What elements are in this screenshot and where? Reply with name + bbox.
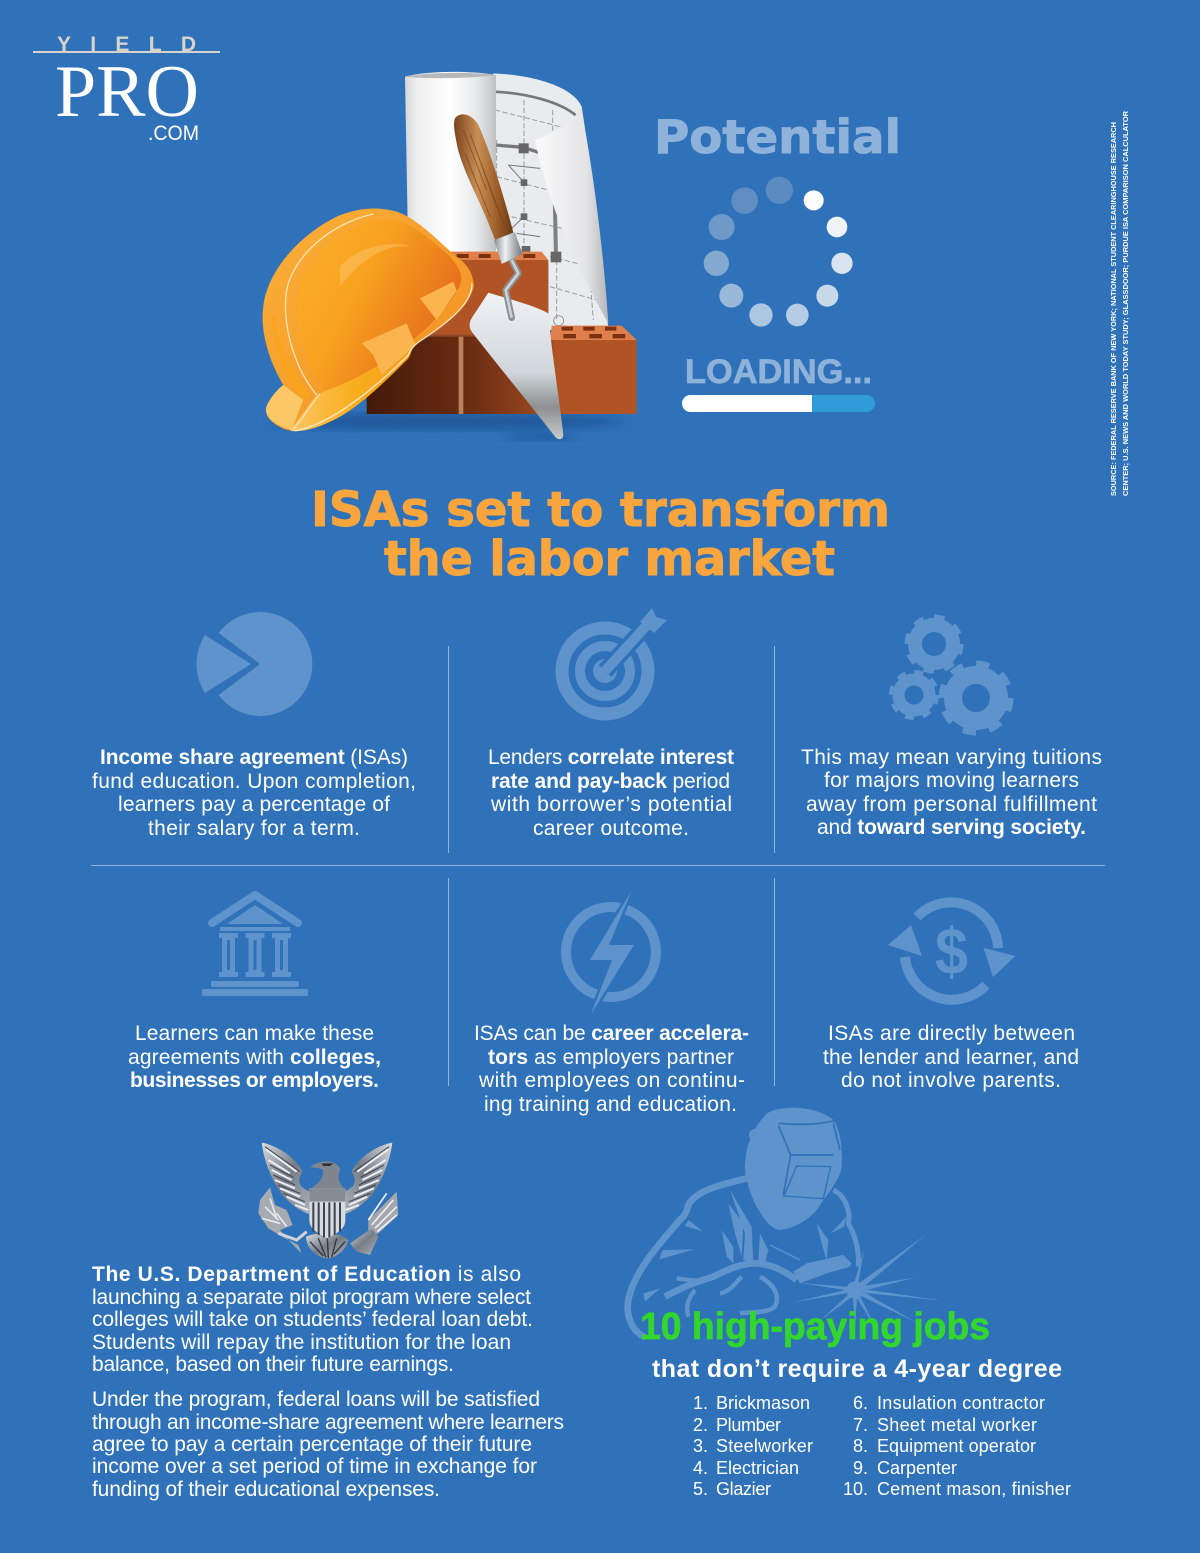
text: lenders correlate: Lenders correlate interest bbox=[488, 746, 734, 769]
text: income share agreement: fund education. Upon completion, bbox=[92, 770, 416, 793]
title bbox=[311, 482, 890, 587]
text: directly between lender and learner: the lender and learner, and bbox=[823, 1046, 1079, 1069]
list: jobs 6 to 10: 7. bbox=[853, 1415, 868, 1435]
list: jobs 1 to 5: Brickmason bbox=[716, 1393, 810, 1413]
text: income-share program details: funding of their educational expenses. bbox=[92, 1478, 440, 1501]
text: income-share program details bbox=[92, 1388, 564, 1501]
text: income share agreement: Income share agreement (ISAs) bbox=[100, 746, 408, 769]
icon: pie chart bbox=[197, 612, 312, 716]
list: jobs 6 to 10: Cement mason, finisher bbox=[877, 1479, 1071, 1499]
icon: gears bbox=[892, 618, 1010, 732]
list: jobs 1 to 5: Steelworker bbox=[716, 1436, 813, 1456]
heading: Potential: Potential bbox=[654, 110, 901, 164]
list: jobs 6 to 10: Insulation contractor bbox=[877, 1393, 1045, 1413]
trowel bbox=[454, 114, 563, 439]
logo: Yield Pro .com: .COM bbox=[148, 122, 199, 145]
text: directly between lender and learner: do not involve parents. bbox=[841, 1069, 1061, 1092]
text: varying tuitions: away from personal fulfillment bbox=[806, 793, 1097, 816]
logo: Yield Pro .com: YIELD bbox=[57, 33, 196, 56]
text: Department of Education pilot: balance, based on their future earnings. bbox=[92, 1353, 454, 1376]
source note: CENTER; U.S. NEWS AND WORLD TODAY STUDY; GLASSDOOR; PURDUE ISA COMPARISON CALCULATOR bbox=[1121, 110, 1130, 496]
text: lenders correlate bbox=[488, 746, 734, 840]
icon: dollar with circular arrows: $ bbox=[935, 914, 968, 988]
icon: silver eagle seal bbox=[258, 1143, 398, 1258]
list: jobs 1 to 5: Glazier bbox=[716, 1479, 771, 1499]
text: Department of Education pilot: The U.S. Department of Education is also bbox=[92, 1263, 521, 1286]
logo: Yield Pro .com: PRO bbox=[55, 51, 199, 133]
text: varying tuitions: This may mean varying tuitions bbox=[801, 746, 1102, 769]
text: income-share program details: agree to pay a certain percentage of their future bbox=[92, 1433, 532, 1456]
text: income-share program details: income over a set period of time in exchange for bbox=[92, 1455, 537, 1478]
loading spinner bbox=[704, 177, 853, 327]
list: jobs 1 to 5: 1. bbox=[693, 1393, 708, 1413]
text: learners can make: businesses or employers. bbox=[130, 1069, 379, 1092]
icon: dollar with circular arrows bbox=[888, 902, 1016, 1000]
text: Department of Education pilot: launching a separate pilot program where select bbox=[92, 1286, 531, 1309]
text: income-share program details: Under the program, federal loans will be satisfied bbox=[92, 1388, 540, 1411]
source note bbox=[1109, 110, 1130, 496]
text: learners can make bbox=[128, 1022, 381, 1092]
text: Department of Education pilot: Students will repay the institution for the loan bbox=[92, 1331, 511, 1354]
subheading: that don’t require a 4-year degree bbox=[652, 1355, 1062, 1383]
list: jobs 6 to 10: 8. bbox=[853, 1436, 868, 1456]
text: career accelerators: ISAs can be career accelera- bbox=[474, 1022, 749, 1045]
text: directly between lender and learner bbox=[823, 1022, 1079, 1092]
upper brick bbox=[420, 252, 548, 338]
text: lenders correlate: rate and pay-back period bbox=[491, 770, 730, 793]
title: ISAs set to transform bbox=[311, 482, 890, 538]
text: career accelerators: with employees on continu- bbox=[478, 1069, 745, 1092]
list: jobs 1 to 5: 5. bbox=[693, 1479, 708, 1499]
blueprint sheet bbox=[493, 73, 608, 330]
lower bricks bbox=[367, 326, 637, 414]
hero illustration: hard hat, bricks, trowel and blueprint bbox=[263, 72, 637, 441]
list: jobs 6 to 10: 6. bbox=[853, 1393, 868, 1413]
list: jobs 1 to 5: 3. bbox=[693, 1436, 708, 1456]
text: career accelerators: tors as employers partner bbox=[488, 1046, 734, 1069]
text: career accelerators: ing training and education. bbox=[484, 1093, 737, 1116]
text: income share agreement bbox=[92, 746, 416, 840]
list: jobs 6 to 10: Carpenter bbox=[877, 1458, 957, 1478]
text: varying tuitions bbox=[801, 746, 1102, 839]
loading progress bar bbox=[682, 395, 875, 412]
list: jobs 1 to 5: Plumber bbox=[716, 1415, 781, 1435]
hard hat bbox=[263, 209, 474, 431]
icon: bank building bbox=[202, 895, 308, 996]
title: the labor market bbox=[384, 531, 835, 587]
text: varying tuitions: for majors moving learners bbox=[824, 769, 1079, 792]
text: lenders correlate: career outcome. bbox=[533, 817, 689, 840]
list: jobs 6 to 10: 9. bbox=[853, 1458, 868, 1478]
list: jobs 6 to 10: 10. bbox=[843, 1479, 868, 1499]
heading: 10 high-paying jobs: 10 high-paying jobs bbox=[640, 1306, 990, 1348]
text: income share agreement: their salary for a term. bbox=[148, 817, 360, 840]
icon: lightning bolt in ring bbox=[566, 891, 656, 1014]
loading label: LOADING... bbox=[685, 353, 872, 391]
list: jobs 6 to 10 bbox=[843, 1393, 1071, 1499]
text: learners can make: Learners can make these bbox=[135, 1022, 374, 1045]
text: learners can make: agreements with colleges, bbox=[128, 1046, 381, 1069]
list: jobs 1 to 5: 4. bbox=[693, 1458, 708, 1478]
text: income-share program details: through an income-share agreement where learners bbox=[92, 1411, 564, 1434]
blueprint roll bbox=[405, 72, 496, 260]
text: career accelerators bbox=[474, 1022, 749, 1116]
illustration: welder silhouette bbox=[628, 1108, 943, 1337]
list: jobs 1 to 5: Electrician bbox=[716, 1458, 799, 1478]
text: Department of Education pilot: colleges will take on students’ federal loan debt. bbox=[92, 1308, 533, 1331]
text: directly between lender and learner: ISAs are directly between bbox=[828, 1022, 1075, 1045]
logo: Yield Pro .com bbox=[33, 33, 220, 145]
source note: SOURCE: FEDERAL RESERVE BANK OF NEW YORK; NATIONAL STUDENT CLEARINGHOUSE RESEARCH bbox=[1109, 122, 1118, 496]
list: jobs 1 to 5: 2. bbox=[693, 1415, 708, 1435]
list: jobs 1 to 5 bbox=[693, 1393, 813, 1499]
icon: target with arrow bbox=[562, 608, 667, 714]
text: varying tuitions: and toward serving society. bbox=[817, 816, 1086, 839]
list: jobs 6 to 10: Sheet metal worker bbox=[877, 1415, 1037, 1435]
list: jobs 6 to 10: Equipment operator bbox=[877, 1436, 1036, 1456]
text: lenders correlate: with borrower’s potential bbox=[490, 793, 732, 816]
text: income share agreement: learners pay a percentage of bbox=[118, 793, 390, 816]
text: Department of Education pilot bbox=[92, 1263, 533, 1376]
